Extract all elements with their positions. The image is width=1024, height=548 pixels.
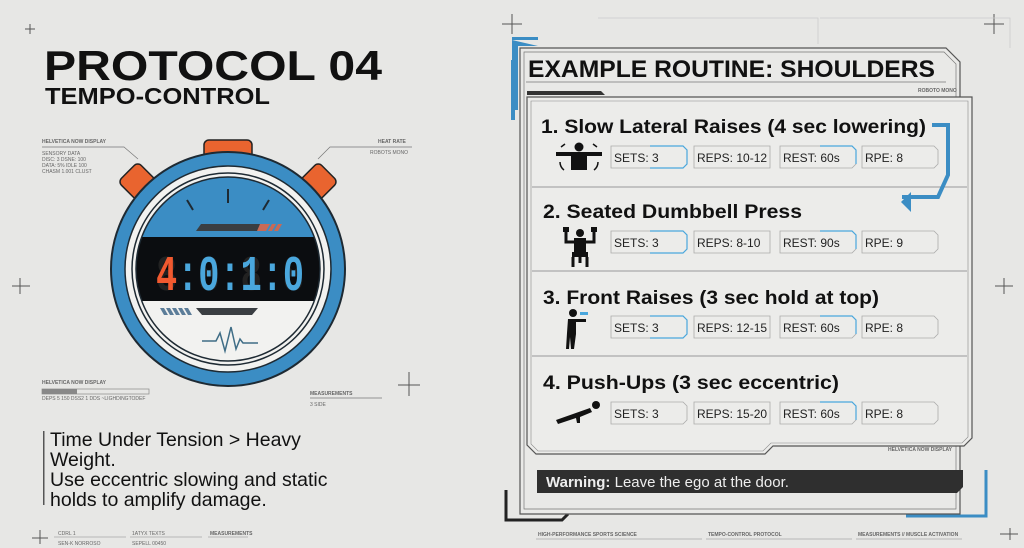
footer meta right: TEMPO-CONTROL PROTOCOL [708, 532, 782, 538]
footer meta right [536, 532, 962, 539]
stat chips: RPE: 8 [865, 407, 903, 421]
row 2 [543, 201, 802, 267]
annotation: left meta: HEAT RATE [378, 139, 407, 145]
stat chips: SETS: 3 [614, 407, 659, 421]
row 4 [543, 372, 839, 424]
stopwatch: 8:8:8:8 [156, 249, 304, 306]
annotation: left meta: CHASM 1.001 CLUST [42, 169, 92, 175]
text block: summary: Weight. [50, 449, 116, 471]
title [44, 42, 383, 109]
footer meta right: MEASUREMENTS // MUSCLE ACTIVATION [858, 532, 959, 538]
stat chips: REPS: 15-20 [697, 407, 767, 421]
footer meta left: 1ATYX TEXTS [132, 531, 166, 537]
row 1 [541, 116, 926, 170]
row 4: 4. Push-Ups (3 sec eccentric) [543, 372, 839, 394]
warning bar [537, 470, 963, 493]
text block: summary: Time Under Tension > Heavy [50, 429, 301, 451]
footer meta left: CDRL 1 [58, 531, 76, 537]
annotation: bottom meta: HELVETICA NOW DISPLAY [42, 380, 107, 386]
annotation: left meta [42, 139, 412, 175]
footer meta left: SEPELL 00450 [132, 541, 166, 547]
stat chips: REPS: 10-12 [697, 151, 767, 165]
stat chips [611, 146, 938, 424]
title: TEMPO-CONTROL [45, 83, 270, 109]
footer meta left [54, 531, 253, 547]
stat chips: REPS: 12-15 [697, 321, 767, 335]
footer meta left: SEN-K NORROSO [58, 541, 101, 547]
footer meta left: MEASUREMENTS [210, 531, 253, 537]
text block: summary [43, 429, 328, 511]
row 3: 3. Front Raises (3 sec hold at top) [543, 287, 879, 309]
row 2: 2. Seated Dumbbell Press [543, 201, 802, 223]
text block: summary: holds to amplify damage. [50, 489, 267, 511]
row 3 [543, 287, 879, 349]
row 1: 1. Slow Lateral Raises (4 sec lowering) [541, 116, 926, 138]
footer meta right: HIGH-PERFORMANCE SPORTS SCIENCE [538, 532, 638, 538]
annotation: left meta: SENSORY DATA [42, 151, 81, 157]
panel: routine: ROBOTO MONO [918, 88, 957, 94]
stat chips: REST: 60s [783, 151, 840, 165]
panel: routine [506, 18, 1010, 520]
stat chips: REPS: 8-10 [697, 236, 761, 250]
annotation: left meta: HELVETICA NOW DISPLAY [42, 139, 107, 145]
stat chips: REST: 60s [783, 407, 840, 421]
annotation: bottom meta: MEASUREMENTS [310, 391, 353, 397]
annotation: bottom meta: 3 SIDE [310, 402, 327, 408]
arrow [902, 125, 948, 197]
stat chips: SETS: 3 [614, 151, 659, 165]
stat chips: RPE: 8 [865, 151, 903, 165]
stat chips: SETS: 3 [614, 321, 659, 335]
stat chips: RPE: 9 [865, 236, 903, 250]
panel: routine: HELVETICA NOW DISPLAY [888, 447, 953, 453]
stat chips: SETS: 3 [614, 236, 659, 250]
warning bar: Warning: Leave the ego at the door. [546, 474, 789, 491]
annotation: left meta: DATA: 5% IDLE 100 [42, 163, 87, 169]
annotation: left meta: ROBOTS MONO [370, 150, 408, 156]
stopwatch [111, 140, 345, 386]
stat chips: RPE: 8 [865, 321, 903, 335]
stat chips: REST: 90s [783, 236, 840, 250]
stopwatch: 4:0:1:0 [156, 249, 304, 306]
stat chips: REST: 60s [783, 321, 840, 335]
annotation: left meta: DISC: 3 DSNE: 100 [42, 157, 86, 163]
title: PROTOCOL 04 [44, 42, 383, 89]
heading: example routine: EXAMPLE ROUTINE: SHOULDERS [528, 56, 935, 83]
text block: summary: Use eccentric slowing and static [50, 469, 328, 491]
annotation: bottom meta [42, 380, 382, 408]
annotation: bottom meta: DEPS 5 150 DSS2 1 DDS ~LIGHDINGTODEF [42, 396, 145, 402]
